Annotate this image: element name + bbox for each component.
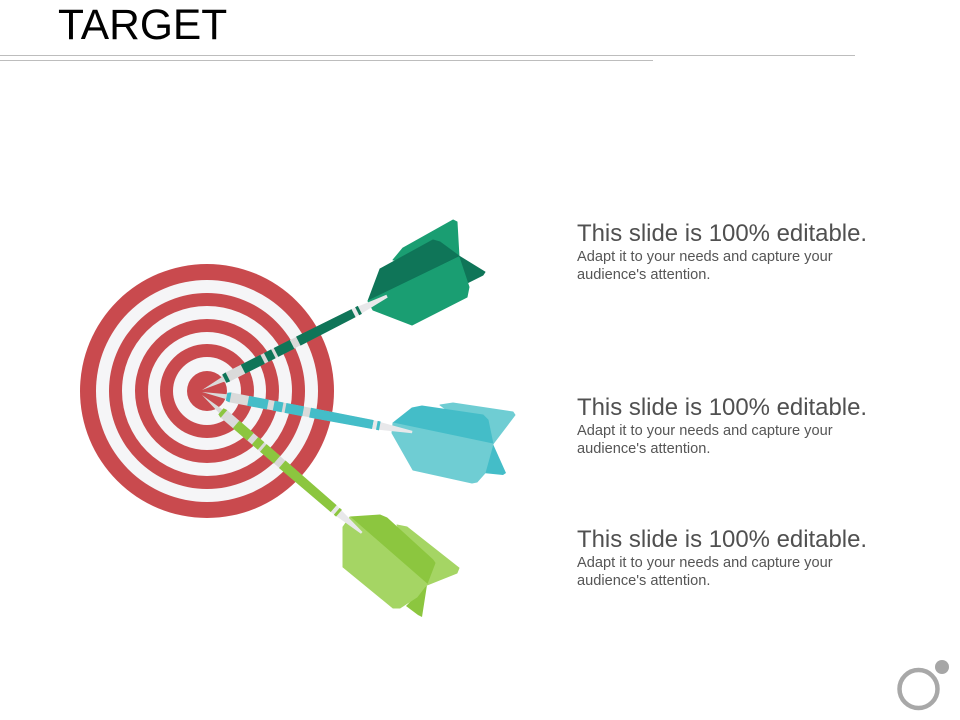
text block 1: audience's attention.	[577, 267, 710, 283]
text block 3: Adapt it to your needs and capture your	[577, 555, 833, 571]
text block 3: This slide is 100% editable.	[577, 526, 867, 553]
dart: teal	[201, 387, 515, 483]
dart: dark green	[200, 220, 485, 394]
text block 2: audience's attention.	[577, 441, 710, 457]
text block 1: This slide is 100% editable.	[577, 220, 867, 247]
header rule short	[0, 60, 653, 61]
text block 2: This slide is 100% editable.	[577, 394, 867, 421]
title: TARGET	[58, 2, 227, 49]
bullseye target	[80, 264, 334, 518]
text block 2	[577, 394, 867, 457]
text block 1: Adapt it to your needs and capture your	[577, 249, 833, 265]
header rule long	[0, 55, 855, 56]
text block 3: audience's attention.	[577, 573, 710, 589]
text block 3	[577, 526, 867, 589]
dart: light green	[199, 391, 459, 617]
text block 2: Adapt it to your needs and capture your	[577, 423, 833, 439]
text block 1	[577, 220, 867, 283]
